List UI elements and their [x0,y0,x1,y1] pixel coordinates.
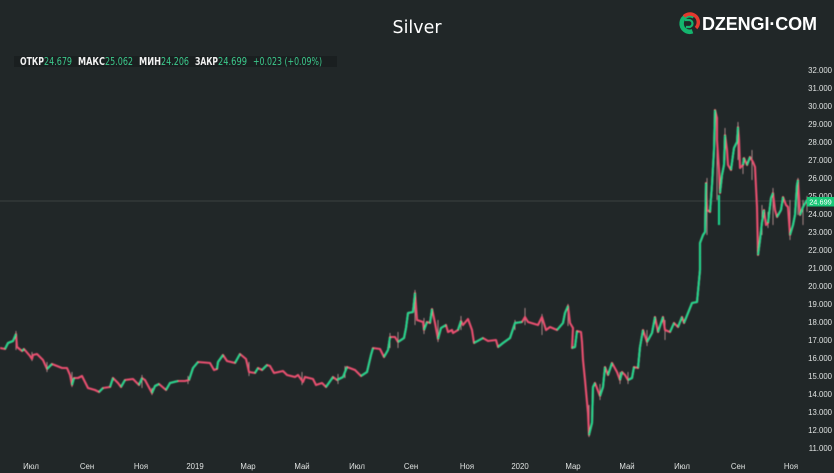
price axis labels: 24.000 [808,210,833,219]
time axis labels: Мар [240,462,256,471]
legend: OHLC values: 24.679 [44,56,72,68]
price axis labels: 29.000 [808,120,833,129]
current price tag: 24.699 [809,198,832,206]
time axis labels [23,462,798,471]
price axis labels: 19.000 [808,300,833,309]
time axis labels: Ноя [460,462,474,471]
price axis labels: 31.000 [808,84,833,93]
legend: OHLC values: +0.023 (+0.09%) [253,56,322,68]
time axis labels: Июл [23,462,39,471]
legend: OHLC values: ОТКР [20,56,44,68]
price chart: silver candlesticks [0,110,807,437]
legend: OHLC values: ЗАКР [195,56,218,68]
chart rising moves [5,110,807,435]
price axis labels: 11.000 [809,444,833,453]
price axis labels: 12.000 [808,426,833,435]
time axis labels: Ноя [784,462,798,471]
time axis labels: Июл [674,462,690,471]
price axis labels: 18.000 [808,318,833,327]
price axis labels: 25.000 [808,192,833,201]
price axis labels: 32.000 [808,66,833,75]
legend: OHLC values: МИН [139,56,161,68]
price axis labels: 13.000 [808,408,833,417]
logo wordmark: DZENGI·COM [702,14,817,34]
chart falling moves [0,110,807,435]
price axis labels: 28.000 [808,138,833,147]
time axis labels: Сен [80,462,94,471]
legend: OHLC values [14,56,337,68]
time axis labels: Май [294,462,310,471]
legend: OHLC values: МАКС [78,56,105,68]
chart wicks [16,118,807,437]
price axis labels: 27.000 [808,156,833,165]
title: Silver [392,17,442,38]
price axis labels: 15.000 [808,372,833,381]
time axis labels: Сен [404,462,418,471]
time axis labels: Июл [349,462,365,471]
time axis labels: Май [619,462,635,471]
price axis labels: 16.000 [808,354,833,363]
price axis labels: 14.000 [808,390,833,399]
current price line [0,200,807,202]
legend: OHLC values: 24.206 [161,56,189,68]
price axis labels: 23.000 [808,228,833,237]
time axis labels: Мар [565,462,581,471]
icon: logo mark [682,14,698,32]
time axis labels: Сен [731,462,745,471]
price axis labels: 17.000 [808,336,833,345]
legend: OHLC values: 25.062 [105,56,133,68]
price axis labels: 26.000 [808,174,833,183]
price axis labels: 22.000 [808,246,833,255]
logo: dzengi.com [682,14,817,34]
time axis labels: 2020 [511,462,529,471]
price axis labels: 30.000 [808,102,833,111]
price axis labels: 21.000 [808,264,833,273]
legend: OHLC values: 24.699 [218,56,247,68]
time axis labels: Ноя [134,462,148,471]
price axis labels: 20.000 [808,282,833,291]
time axis labels: 2019 [186,462,204,471]
price axis labels [808,66,833,453]
